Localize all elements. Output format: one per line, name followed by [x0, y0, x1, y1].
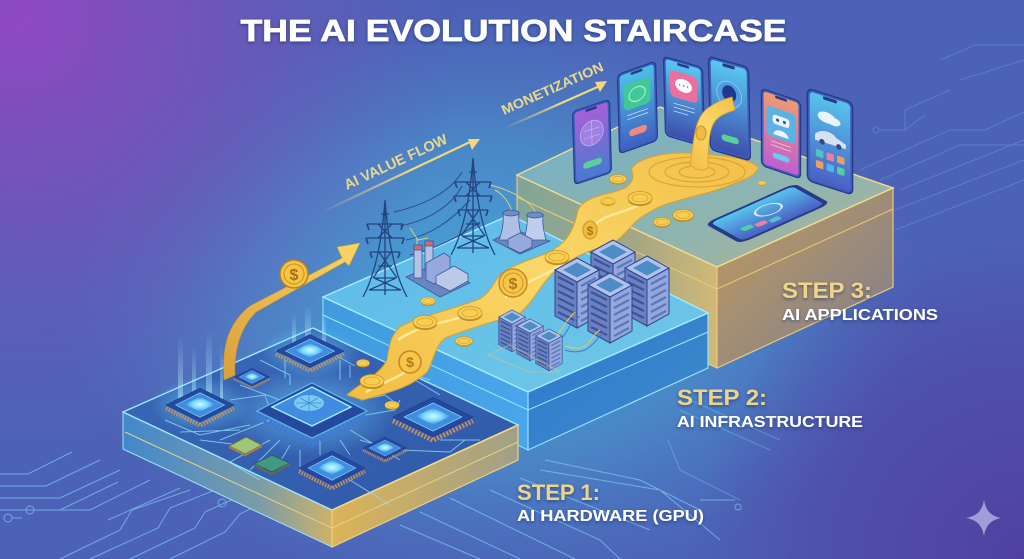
- large dollar coin: middle: $: [509, 276, 518, 293]
- slab 2 right face: [528, 313, 708, 450]
- server cabling: [558, 312, 604, 352]
- transmission tower 1: [363, 200, 407, 297]
- icon: cooling towers: [493, 210, 550, 254]
- gold value stream with coins: [347, 153, 758, 400]
- AI hardware chips: [150, 305, 473, 488]
- slab 2 top surface: [323, 215, 708, 392]
- icon: sparkle: [966, 500, 1001, 536]
- slab 2 left face: [323, 297, 528, 450]
- large dollar coin: lower: [399, 351, 421, 373]
- phone: flat on platform: [704, 183, 831, 244]
- arrow: AI value flow: [320, 132, 480, 213]
- glow halos around chips: [150, 326, 397, 457]
- phone: chat: [663, 56, 705, 148]
- label: step 3: AI APPLICATIONS: [782, 307, 938, 324]
- phone: cloud and car: [807, 87, 853, 196]
- stack of server racks: [488, 240, 669, 372]
- panel: step 1 slab, AI hardware: [123, 328, 518, 547]
- glow streaks above chips: [178, 305, 326, 405]
- large dollar coin: middle: [499, 269, 527, 297]
- chip: bottom: [299, 451, 365, 488]
- chip: small lower right: [363, 437, 407, 461]
- phone: green brain: [617, 60, 658, 155]
- gold pool ripples: [649, 157, 745, 187]
- label: monetization: MONETIZATION: [499, 59, 606, 118]
- label: step 2: STEP 2:: [677, 385, 767, 410]
- chip: small upper: [234, 368, 270, 388]
- dollar coin: upper: $: [587, 224, 594, 238]
- large dollar coin: lower: $: [406, 354, 414, 370]
- label: step 1: STEP 1:: [517, 480, 600, 505]
- chip: central GPU: [257, 383, 367, 444]
- slab 3 right face: [717, 188, 893, 368]
- phone: portal: [708, 55, 751, 162]
- label: step 1: [517, 480, 704, 525]
- panel: step 3 slab, AI applications: [517, 107, 893, 368]
- server: right: [625, 256, 669, 326]
- icon: factory: [406, 241, 470, 297]
- slab 3 top surface: [517, 107, 893, 267]
- chip: right: [393, 398, 473, 440]
- icon: power towers and lines: [363, 158, 536, 297]
- arrow: monetization: [499, 59, 607, 129]
- chip: top: [276, 334, 344, 371]
- memory module: dark green: [254, 455, 290, 474]
- label: step 1: AI HARDWARE (GPU): [517, 508, 704, 525]
- dollar coin on pour: [696, 126, 706, 140]
- coin on arrow: $: [290, 267, 299, 284]
- server: left: [555, 258, 599, 328]
- label: step 2: AI INFRASTRUCTURE: [677, 414, 863, 431]
- phone row: [572, 55, 853, 244]
- small server racks: [499, 310, 525, 352]
- label: step 2: [677, 385, 863, 431]
- liquid gold river: [347, 153, 758, 400]
- server: front: [588, 273, 632, 343]
- title: THE AI EVOLUTION STAIRCASE: [240, 13, 786, 48]
- transmission tower 2: [451, 158, 495, 255]
- phone: robot: [761, 87, 801, 180]
- phone: brain: [572, 99, 612, 185]
- power line cables: [394, 172, 480, 255]
- coins on the stream: [356, 126, 766, 410]
- gold pour from portal phone: [690, 97, 735, 170]
- label: step 3: [782, 278, 938, 324]
- slab 1 top surface: [123, 328, 518, 510]
- panel: step 2 slab, AI infrastructure: [323, 215, 708, 450]
- slab 1 left face: [123, 412, 332, 547]
- label: AI value flow: AI VALUE FLOW: [342, 132, 450, 194]
- label: step 3: STEP 3:: [782, 278, 872, 303]
- arrow: rising gold arrow with coin: [224, 243, 360, 380]
- server: back: [591, 240, 635, 310]
- slab 3 left face: [517, 175, 717, 368]
- slab 1 circuit traces: [165, 350, 480, 505]
- slab 1 right face: [332, 425, 518, 547]
- dollar coin: upper: [583, 221, 597, 239]
- memory module: light green: [229, 437, 262, 455]
- chip: left: [166, 388, 234, 425]
